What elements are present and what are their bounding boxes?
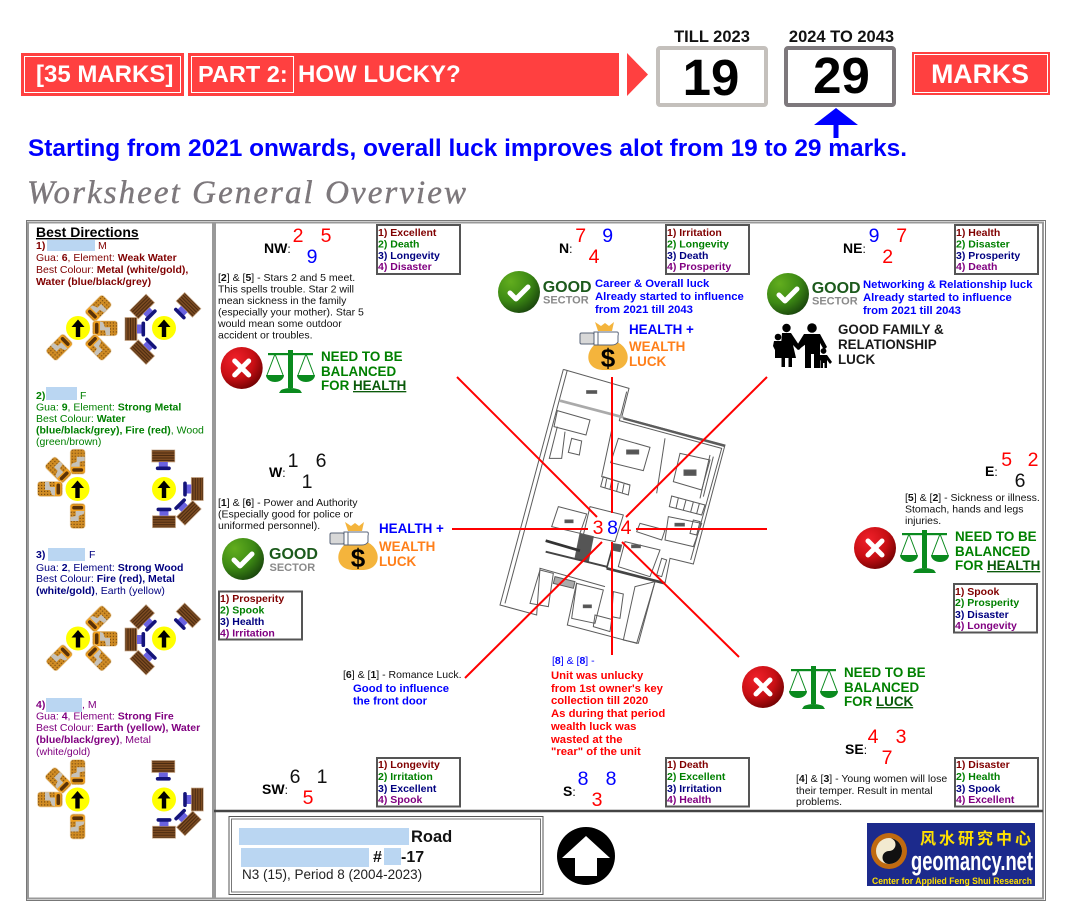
- text: family luck: LUCK: [838, 352, 876, 367]
- legend: E: 1) Spook: [955, 586, 999, 598]
- person 2 details: [36, 387, 204, 448]
- logo: geomancy.net: [867, 823, 1035, 886]
- stars: N: 4: [589, 246, 600, 268]
- stars: S: 3: [592, 789, 602, 811]
- person 3 details: (white/gold), Earth (yellow): [36, 585, 165, 597]
- person 4 details: Gua: 4, Element: Strong Fire: [36, 710, 174, 722]
- text: NE networking luck: [863, 279, 1033, 317]
- legend: N: 1) Irritation: [667, 227, 722, 239]
- stars: NE: [843, 225, 907, 268]
- text: NE good sector: SECTOR: [812, 296, 858, 308]
- stars: S: 8: [606, 768, 616, 790]
- person 2 details: 2): [36, 390, 45, 402]
- text: NE networking luck: from 2021 till 2043: [863, 305, 961, 317]
- text: NW balance: FOR HEALTH: [321, 378, 406, 393]
- stars: E: E:: [985, 463, 998, 479]
- legend: NW: 4) Disaster: [378, 261, 432, 273]
- text: W note: uniformed personnel).: [218, 520, 320, 532]
- stars: N: 9: [602, 225, 613, 247]
- heading: luck statement: Starting from 2021 onwards, overall luck improves alot from 19 to 29 marks.: [28, 135, 907, 162]
- panel: E sector: [854, 449, 1040, 632]
- text: N career luck: [595, 278, 744, 316]
- icon: person 4 desk directions: [38, 760, 203, 839]
- text: E balance: FOR HEALTH: [955, 558, 1040, 573]
- stars: SW: [262, 766, 327, 809]
- text: S note: wealth luck was: [550, 721, 636, 733]
- legend: W: 1) Prosperity: [220, 593, 284, 605]
- text: SE note: their temper. Result in mental: [796, 785, 933, 797]
- icon: SE scales: [789, 666, 838, 709]
- score: 2024 to 2043: [786, 28, 894, 105]
- text: W health wealth: WEALTH: [379, 539, 435, 554]
- icon: NW red cross: [221, 347, 263, 389]
- stars: NW: NW:: [264, 240, 291, 256]
- person 4 details: Best Colour: Earth (yellow), Water: [36, 722, 200, 734]
- stars: W: 1: [302, 471, 312, 493]
- text: N career luck: Already started to influence: [595, 291, 744, 303]
- panel: W sector: [218, 450, 444, 640]
- icon: N good: [498, 271, 540, 313]
- panel: best directions: [36, 224, 204, 839]
- text: SE balance: FOR LUCK: [844, 694, 914, 709]
- text: N health wealth: [629, 322, 694, 369]
- text: S note: [550, 655, 665, 758]
- legend: SE: 4) Excellent: [956, 794, 1015, 806]
- text: W good sector: GOOD: [269, 546, 318, 563]
- banner: marks: MARKS: [931, 59, 1029, 89]
- text: S note: Unit was unlucky: [551, 670, 644, 682]
- panel: SE sector: [742, 665, 1038, 808]
- panel: address box: Road: [411, 828, 452, 846]
- legend: NE: 3) Prosperity: [956, 250, 1020, 262]
- stars: SW: 5: [303, 787, 314, 809]
- legend: W: 4) Irritation: [220, 628, 275, 640]
- icon: E red cross: [854, 527, 896, 569]
- person 1 details: Water (blue/black/grey): [36, 276, 151, 288]
- person 4 details: 4): [36, 699, 45, 711]
- text: NW note: would mean some outdoor: [217, 318, 342, 330]
- legend: W: 2) Spook: [220, 604, 264, 616]
- icon: person 3 desk directions: [45, 603, 201, 675]
- legend: W: 3) Health: [220, 616, 264, 628]
- legend: SW: [377, 758, 460, 806]
- stars: SE: SE:: [845, 741, 867, 757]
- centre stars: 3: [593, 517, 603, 539]
- legend: SE: 2) Health: [956, 771, 1000, 783]
- text: S note: As during that period: [551, 708, 665, 720]
- legend: E: 4) Longevity: [955, 620, 1017, 632]
- legend: SE: 3) Spook: [956, 783, 1000, 795]
- text: family luck: RELATIONSHIP: [838, 337, 937, 352]
- text: E balance: NEED TO BE: [955, 529, 1037, 544]
- text: SE note: [796, 773, 947, 808]
- centre stars: [593, 517, 632, 539]
- stars: W: [269, 450, 326, 493]
- legend: S: [666, 758, 749, 806]
- legend: SE: [955, 758, 1038, 806]
- stars: SW: 6: [290, 766, 300, 788]
- text: N career luck: Career & Overall luck: [595, 278, 710, 290]
- text: NW note: This spells trouble. Star 2 will: [218, 284, 354, 296]
- legend: NE: [955, 225, 1038, 274]
- panel: address box: -17: [401, 849, 424, 866]
- centre stars: 8: [607, 517, 618, 539]
- icon: NW scales: [266, 350, 315, 393]
- stars: E: 2: [1028, 449, 1038, 471]
- stars: W: 6: [316, 450, 326, 472]
- text: S note: from 1st owner's key: [551, 683, 664, 695]
- icon: family: [773, 323, 832, 368]
- text: W health wealth: LUCK: [379, 554, 417, 569]
- stars: N: N:: [559, 240, 572, 256]
- legend: NE: 2) Disaster: [956, 238, 1010, 250]
- text: family luck: GOOD FAMILY &: [838, 322, 944, 337]
- stars: E: [985, 449, 1038, 492]
- icon: SE red cross: [742, 666, 784, 708]
- text: NE networking luck: Already started to influence: [863, 292, 1012, 304]
- worksheet table frame: [26, 220, 1046, 900]
- icon: W money bag: [330, 522, 378, 573]
- stars: NE: NE:: [843, 240, 866, 256]
- text: W health wealth: HEALTH +: [379, 521, 444, 536]
- legend: S: 3) Irritation: [667, 783, 722, 795]
- banner: 35 marks: [21, 53, 184, 96]
- panel: address box: #: [373, 849, 382, 866]
- text: NW note: [2] & [5] - Stars 2 and 5 meet.: [218, 272, 355, 284]
- person 3 details: Gua: 2, Element: Strong Wood: [36, 562, 183, 574]
- legend: S: 4) Health: [667, 794, 711, 806]
- text: E note: injuries.: [905, 515, 941, 527]
- text: family luck: [838, 322, 944, 367]
- heading: best directions: Best Directions: [36, 224, 139, 240]
- centre stars: 4: [621, 517, 632, 539]
- stars: N: [559, 225, 613, 268]
- legend: N: 4) Prosperity: [667, 261, 731, 273]
- text: N health wealth: LUCK: [629, 354, 667, 369]
- legend: NW: 1) Excellent: [378, 227, 437, 239]
- stars: SE: 3: [896, 726, 906, 748]
- stars: NW: 5: [321, 225, 332, 247]
- text: NW note: (especially your mother). Star 5: [218, 306, 364, 318]
- text: W note: [218, 497, 358, 532]
- text: E note: Stomach, hands and legs: [905, 504, 1024, 516]
- text: NE good sector: GOOD: [812, 280, 861, 297]
- stars: SE: [845, 726, 906, 769]
- banner: marks: [912, 52, 1050, 95]
- legend: SE: 1) Disaster: [956, 759, 1010, 771]
- person 2 details: Best Colour: Water: [36, 413, 126, 425]
- legend: E: 3) Disaster: [955, 609, 1009, 621]
- person 3 details: Best Colour: Fire (red), Metal: [36, 573, 175, 585]
- text: SE note: [4] & [3] - Young women will lose: [796, 773, 947, 785]
- person 1 details: 1): [36, 240, 45, 252]
- text: W note: [1] & [6] - Power and Authority: [218, 497, 358, 509]
- text: NW balance: BALANCED: [321, 364, 396, 379]
- stars: SE: 4: [868, 726, 879, 748]
- legend: NE: 4) Death: [956, 261, 997, 273]
- icon: N money bag: [580, 322, 628, 373]
- person 2 details: (blue/black/grey), Fire (red), Wood: [36, 424, 204, 436]
- panel: N sector: [498, 225, 749, 373]
- logo: geomancy.net: Center for Applied Feng Shui Research: [872, 876, 1032, 886]
- legend: S: 2) Excellent: [667, 771, 726, 783]
- text: E note: [5] & [2] - Sickness or illness.: [905, 492, 1040, 504]
- stars: NE: 9: [869, 225, 879, 247]
- person 4 details: [36, 698, 200, 758]
- icon: NE good: [767, 273, 809, 315]
- person 1 details: [36, 240, 188, 288]
- legend: W: [219, 592, 302, 640]
- legend: SW: 3) Excellent: [378, 783, 437, 795]
- text: NW balance: [321, 349, 406, 393]
- logo: geomancy.net: 风水研究中心: [920, 829, 1031, 848]
- legend: SW: 1) Longevity: [378, 759, 440, 771]
- sector lines: [452, 377, 767, 678]
- icon: W good: [222, 538, 264, 580]
- stars: W: W:: [269, 464, 286, 480]
- legend: NW: 3) Longevity: [378, 250, 440, 262]
- person 4 details: (white/gold): [36, 746, 90, 758]
- stars: S: 8: [578, 768, 588, 790]
- text: NE good sector: [812, 280, 861, 308]
- text: SW note: [6] & [1] - Romance Luck.: [343, 669, 462, 681]
- icon: north arrow: [557, 827, 615, 885]
- legend: NE: 1) Health: [956, 227, 1000, 239]
- text: E balance: [955, 529, 1040, 573]
- legend: N: [666, 225, 749, 274]
- stars: NW: 2: [293, 225, 303, 247]
- legend: SW: 4) Spook: [378, 794, 422, 806]
- person 4 details: , M: [82, 699, 97, 711]
- stars: E: 6: [1015, 470, 1025, 492]
- banner: 35 marks: [35 MARKS]: [36, 61, 173, 88]
- person 4 details: (blue/black/grey), Metal: [36, 734, 151, 746]
- banner: part 2 how lucky: HOW LUCKY?: [298, 61, 461, 88]
- legend: SW: 2) Irritation: [378, 771, 433, 783]
- text: SE balance: NEED TO BE: [844, 665, 926, 680]
- stars: SW: 1: [317, 766, 327, 788]
- text: NW note: accident or troubles.: [218, 330, 313, 342]
- text: NW note: mean sickness in the family: [218, 295, 347, 307]
- text: SE note: problems.: [796, 796, 842, 808]
- text: N good sector: SECTOR: [543, 294, 589, 306]
- panel: NW sector: [217, 225, 460, 393]
- text: SW note: the front door: [353, 696, 428, 708]
- score: 2024 to 2043: 2024 TO 2043: [789, 28, 894, 46]
- text: N health wealth: WEALTH: [629, 339, 685, 354]
- score: till 2023: [658, 28, 766, 106]
- text: N career luck: from 2021 till 2043: [595, 304, 693, 316]
- text: SW note: Good to influence: [353, 683, 449, 695]
- text: N health wealth: HEALTH +: [629, 322, 694, 337]
- text: W note: (Especially good for police or: [218, 508, 353, 520]
- stars: NW: [264, 225, 332, 268]
- person 2 details: Gua: 9, Element: Strong Metal: [36, 402, 181, 414]
- arrow: banner pointer: [627, 53, 648, 96]
- legend: NW: 2) Death: [378, 238, 419, 250]
- stars: S: [563, 768, 616, 811]
- stars: E: 5: [1001, 449, 1012, 471]
- stars: NW: 9: [307, 246, 317, 268]
- score: 2024 to 2043: 29: [813, 47, 870, 104]
- person 2 details: F: [80, 390, 86, 402]
- legend: NW: [377, 225, 460, 274]
- person 1 details: Best Colour: Metal (white/gold),: [36, 264, 188, 276]
- text: SW note: [343, 669, 462, 708]
- stars: SE: 7: [882, 747, 892, 769]
- text: SE balance: [844, 665, 926, 709]
- panel: SW sector: [262, 669, 462, 809]
- person 3 details: [36, 548, 183, 597]
- text: W good sector: [269, 546, 318, 574]
- legend: E: 2) Prosperity: [955, 597, 1019, 609]
- text: SE balance: BALANCED: [844, 680, 919, 695]
- text: N good sector: [543, 279, 592, 306]
- icon: person 2 desk directions: [38, 449, 203, 528]
- legend: S: 1) Death: [667, 759, 708, 771]
- person 3 details: F: [89, 549, 95, 561]
- text: NW balance: NEED TO BE: [321, 349, 403, 364]
- text: E balance: BALANCED: [955, 544, 1030, 559]
- text: S note: collection till 2020: [551, 695, 648, 707]
- score: till 2023: 19: [683, 49, 739, 106]
- banner: part 2 how lucky: PART 2:: [198, 61, 288, 87]
- floor plan: [500, 369, 725, 643]
- stars: NE: 2: [882, 246, 893, 268]
- banner: part 2 how lucky: [188, 53, 619, 96]
- text: S note: "rear" of the unit: [551, 746, 641, 758]
- panel: address box: [229, 816, 543, 894]
- icon: E scales: [900, 530, 949, 573]
- heading: worksheet general overview: Worksheet General Overview: [27, 175, 466, 211]
- text: S note: wasted at the: [550, 734, 623, 746]
- text: S note: [8] & [8] -: [552, 655, 595, 667]
- text: W good sector: SECTOR: [270, 562, 315, 574]
- text: N good sector: GOOD: [543, 279, 592, 296]
- panel: S sector: [550, 655, 749, 811]
- person 3 details: 3): [36, 549, 45, 561]
- stars: N: 7: [575, 225, 586, 247]
- person 1 details: Gua: 6, Element: Weak Water: [36, 252, 177, 264]
- legend: N: 2) Longevity: [667, 238, 729, 250]
- stars: S: S:: [563, 783, 576, 799]
- text: NW note: [217, 272, 364, 342]
- stars: W: 1: [288, 450, 298, 472]
- text: NE networking luck: Networking & Relationship luck: [863, 279, 1033, 291]
- person 1 details: M: [98, 240, 107, 252]
- score: till 2023: TILL 2023: [674, 28, 750, 46]
- arrow: blue up arrow: [814, 108, 858, 138]
- text: W health wealth: [379, 521, 444, 569]
- legend: N: 3) Death: [667, 250, 708, 262]
- person 2 details: (green/brown): [36, 436, 101, 448]
- legend: E: [954, 584, 1037, 632]
- text: E note: [905, 492, 1040, 527]
- stars: SW: SW:: [262, 781, 288, 797]
- panel: NE sector: [767, 225, 1038, 368]
- icon: person 1 desk directions: [45, 292, 201, 365]
- stars: NE: 7: [896, 225, 907, 247]
- panel: address box: N3 (15), Period 8 (2004-2023): [242, 867, 422, 882]
